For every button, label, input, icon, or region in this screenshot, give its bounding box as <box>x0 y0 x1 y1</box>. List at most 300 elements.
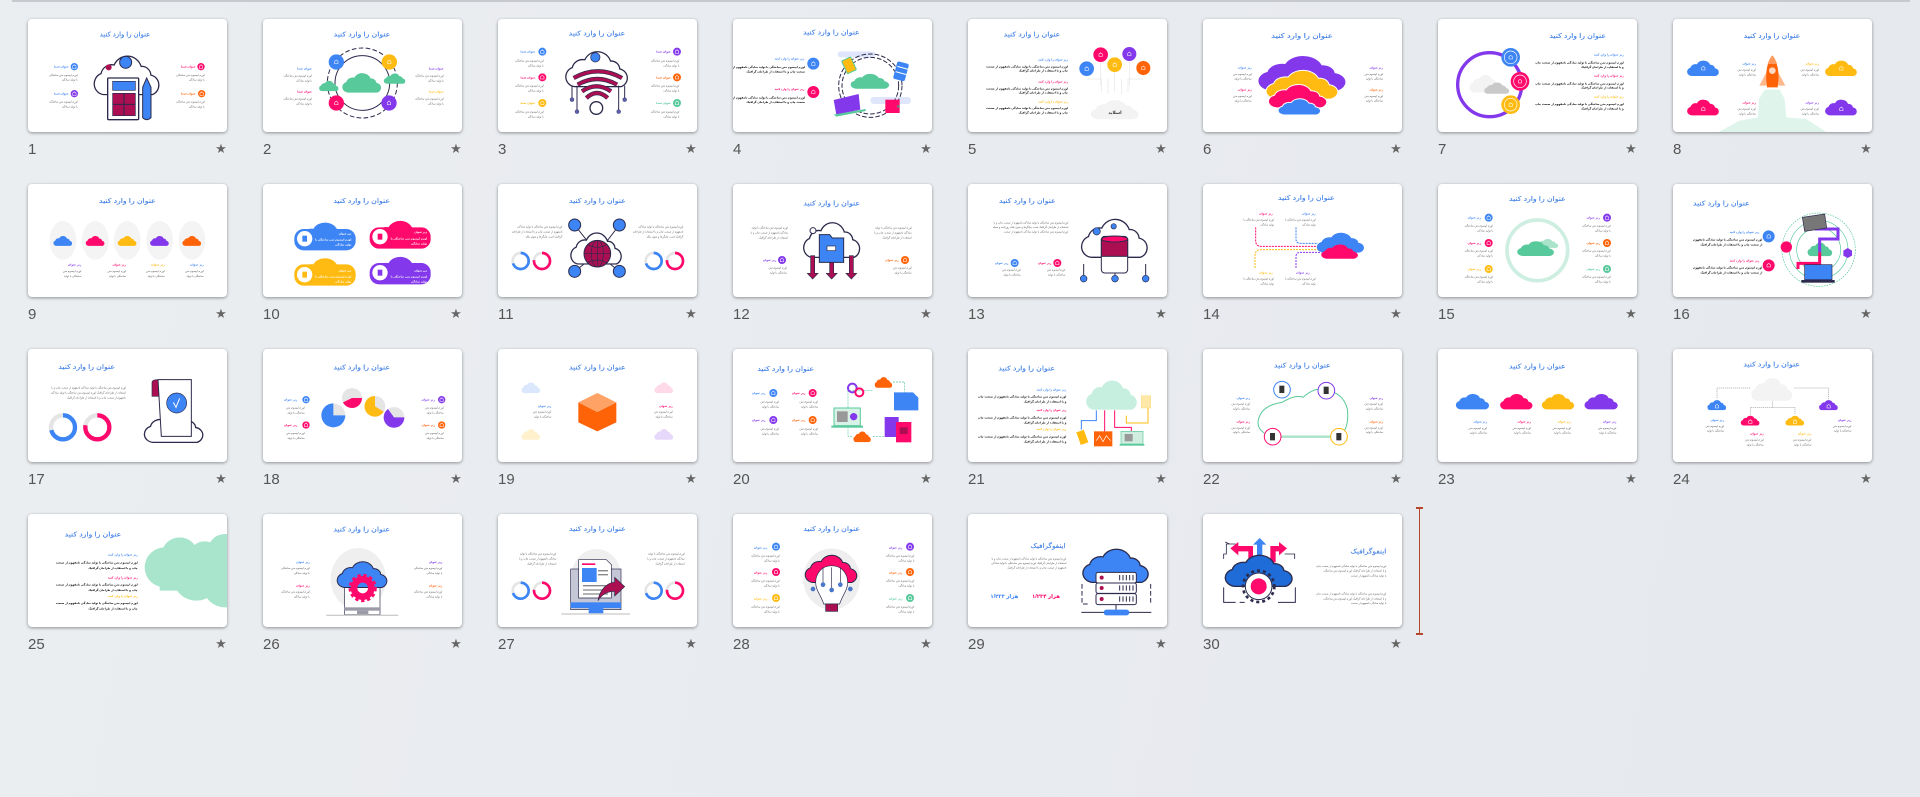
right labels: زیر عنوان <box>1586 216 1600 220</box>
labels: لورم ایپسوم متن <box>760 428 779 432</box>
left labels: با تولید سادگی <box>1477 254 1493 258</box>
labels: ساختگی با تولید <box>1599 431 1616 435</box>
labels: با تولید سادگی <box>294 571 310 575</box>
labels: زیر عنوان را وارد کنید <box>1594 53 1624 57</box>
labels: لورم ایپسوم متن ساختگی با <box>1284 277 1316 282</box>
slide 19: orange cube <box>498 349 697 462</box>
labels: و با استفاده از طراحان گرافیک <box>1581 107 1624 111</box>
labels: ساختگی با تولید <box>1234 77 1251 81</box>
labels: ساختگی با تولید <box>1746 443 1763 447</box>
labels: تولید سادگی <box>1260 223 1274 227</box>
body text: نامفهوم از صنعت چاپ و با استفاده از طراحان <box>512 231 562 235</box>
slide 29: server cloud <box>968 514 1167 627</box>
title: عنوان را وارد کنید <box>1743 361 1800 369</box>
number 29: 29 <box>968 636 985 653</box>
labels: زیر عنوان <box>284 398 297 402</box>
left labels: با تولید سادگی <box>528 115 544 119</box>
labels: لورم ایپسوم متن ساختگی با <box>1284 218 1316 223</box>
labels: ساختگی با تولید <box>1738 112 1756 116</box>
slide 25: large green cloud <box>28 514 227 627</box>
labels: لورم ایپسوم متن ساختگی <box>281 590 310 595</box>
labels: زیر عنوان را وارد کنید <box>1036 388 1066 392</box>
slide 15: ringed cloud <box>1438 184 1637 297</box>
right labels <box>176 63 205 109</box>
left labels: با تولید سادگی <box>62 105 78 109</box>
right labels: لورم ایپسوم متن ساختگی <box>176 100 205 105</box>
right labels: با تولید سادگی <box>189 105 205 109</box>
labels: چاپ و با استفاده از طراحان گرافیک <box>88 607 137 611</box>
left labels: زیر عنوان <box>754 546 767 550</box>
insertion marker <box>1416 507 1423 635</box>
number 7: 7 <box>1438 141 1446 158</box>
number 13: 13 <box>968 306 985 323</box>
title: عنوان را وارد کنید <box>58 363 115 371</box>
labels: زیر عنوان <box>414 231 427 234</box>
left labels: زیر عنوان <box>1467 267 1481 271</box>
labels: ساختگی با تولید <box>1365 407 1383 411</box>
labels: لورم ایپسوم متن <box>63 270 81 274</box>
star 10: ★ <box>450 307 462 322</box>
right labels: لورم ایپسوم متن ساختگی <box>651 110 679 115</box>
illustration: gears, clouds, screen, docs <box>831 378 918 443</box>
left labels: با تولید سادگی <box>528 64 544 68</box>
labels <box>1468 420 1616 435</box>
labels <box>995 259 1065 277</box>
pale clouds <box>521 383 673 440</box>
labels: با تولید سادگی <box>296 102 312 106</box>
ring and clouds <box>1507 220 1567 281</box>
labels: ساختگی با تولید <box>1469 431 1487 435</box>
title: عنوان را وارد کنید <box>568 30 625 38</box>
labels: ساختگی با تولید <box>1365 99 1383 103</box>
labels: زیر عنوان را وارد کنید <box>108 576 138 580</box>
body text: لورم ایپسوم متن ساختگی با تولید <box>519 552 556 557</box>
body text: لورم ایپسوم متن ساختگی با تولید سادگی نامفهوم از صنعت <box>1003 230 1068 235</box>
star 20: ★ <box>920 472 932 487</box>
title: عنوان را وارد کنید <box>1274 362 1330 370</box>
labels: زیر عنوان <box>538 404 551 408</box>
labels: زیر عنوان <box>1603 420 1616 424</box>
slide 12: folder cloud with arrows <box>733 184 932 297</box>
left labels: با تولید سادگی <box>528 89 544 93</box>
labels: تولید سادگی <box>1302 223 1316 227</box>
slide 30: gear cloud with arrows <box>1203 514 1402 627</box>
labels: ساختگی با تولید <box>1801 73 1819 77</box>
right labels: لورم ایپسوم متن ساختگی <box>886 605 914 610</box>
labels: لورم ایپسوم متن ساختگی با تولید سادگی نامفهوم از صنعت <box>56 601 137 605</box>
labels: زیر عنوان را وارد کنید <box>1729 259 1759 263</box>
labels: لورم ایپسوم متن ساختگی با تولید سادگی نامفهوم از صنعت چاپ <box>1535 82 1623 86</box>
right labels: با تولید سادگی <box>189 78 205 82</box>
pie charts <box>321 388 404 428</box>
labels: لورم ایپسوم متن <box>1705 425 1724 429</box>
labels: عنوان شما <box>297 90 312 94</box>
labels: ساختگی با تولید <box>1738 73 1756 77</box>
statistic figures: ۱/۲۳۴ هزار <box>1032 594 1060 600</box>
labels: زیر عنوان را وارد کنید <box>108 553 138 557</box>
labels: با تولید سادگی <box>294 595 310 599</box>
labels: لورم ایپسوم متن ساختگی با <box>315 275 351 279</box>
labels: ساختگی با تولید <box>287 411 304 415</box>
labels: لورم ایپسوم متن ساختگی با تولید سادگی نامفهوم از صنعت چاپ <box>1535 61 1623 65</box>
right labels: با تولید سادگی <box>898 610 914 614</box>
body text <box>993 221 1068 235</box>
slide 13: database cloud <box>968 184 1167 297</box>
labels: زیر عنوان را وارد کنید <box>1594 74 1624 78</box>
number 15: 15 <box>1438 306 1455 323</box>
star 27: ★ <box>685 637 697 652</box>
right labels: عنوان شما <box>181 92 195 96</box>
labels: با تولید سادگی <box>426 595 442 599</box>
right labels: با تولید سادگی <box>663 115 679 119</box>
title: عنوان را وارد کنید <box>64 531 121 539</box>
body text: نامفهوم از صنعت چاپ و با استفاده از طراحان <box>633 231 683 235</box>
body text: استفاده از طراحان گرافیک <box>758 236 788 240</box>
right labels: لورم ایپسوم متن ساختگی <box>886 554 914 559</box>
labels: زیر عنوان را وارد کنید <box>1038 58 1068 62</box>
star 16: ★ <box>1860 307 1872 322</box>
right labels: با تولید سادگی <box>663 64 679 68</box>
body text: استفاده از طراحان گرافیک است چاپگرها و متون بلکه روزنامه و مجله <box>993 225 1068 229</box>
labels: تولید سادگی <box>335 243 351 247</box>
star 14: ★ <box>1390 307 1402 322</box>
labels: زیر عنوان <box>296 560 310 564</box>
labels: لورم ایپسوم متن <box>1833 425 1851 429</box>
illustration: cloud path and nodes <box>1258 382 1347 445</box>
labels: تولید سادگی <box>410 280 427 284</box>
slide 20: gears and documents <box>733 349 932 462</box>
number 18: 18 <box>263 471 280 488</box>
body text <box>518 552 685 566</box>
labels: لورم ایپسوم متن ساختگی با <box>315 238 351 242</box>
right labels: زیر عنوان <box>1586 241 1600 245</box>
slide 22: cloud outline with nodes <box>1203 349 1402 462</box>
left labels: لورم ایپسوم متن ساختگی <box>1464 224 1493 229</box>
labels: چاپ و با استفاده از طراحان گرافیک <box>88 588 137 592</box>
right labels: زیر عنوان <box>889 571 902 575</box>
labels: لورم ایپسوم متن <box>1231 427 1250 431</box>
labels: زیر عنوان <box>1369 420 1383 424</box>
slide 1: calculator cloud <box>28 19 227 132</box>
body text: با تولید سادگی نامفهوم از صنعت <box>1350 601 1386 606</box>
body text: نامفهوم از صنعت چاپ و با استفاده از طراحان گرافیک <box>1007 566 1066 571</box>
body text: سادگی نامفهوم از صنعت چاپ و با <box>750 231 788 236</box>
title: عنوان را وارد کنید <box>333 526 390 534</box>
title: عنوان را وارد کنید <box>99 197 155 205</box>
labels: زیر عنوان <box>1557 420 1571 424</box>
labels <box>1693 230 1774 275</box>
title: عنوان را وارد کنید <box>99 31 150 39</box>
labels: ساختگی با تولید <box>426 411 443 415</box>
illustration: cloud ring with devices <box>833 52 911 118</box>
right labels: با تولید سادگی <box>1595 229 1611 233</box>
labels: لورم ایپسوم متن <box>760 401 779 405</box>
labels: زیر عنوان <box>1259 212 1273 216</box>
left labels: با تولید سادگی <box>1477 280 1493 284</box>
labels: زیر عنوان <box>1805 62 1819 66</box>
labels: تولید سادگی <box>410 242 427 246</box>
left labels: با تولید سادگی <box>764 559 780 563</box>
labels: زیر عنوان <box>1517 420 1531 424</box>
body text: گرافیک است چاپگرها و متون بلکه <box>525 235 563 239</box>
illustration: cloud, gear, monitor <box>326 548 398 616</box>
labels: لورم ایپسوم متن ساختگی با تولید سادگی نامفهوم از صنعت <box>986 65 1068 69</box>
left labels: زیر عنوان <box>1467 216 1481 220</box>
number 10: 10 <box>263 306 280 323</box>
labels: عنوان شما <box>429 67 443 71</box>
labels: زیر عنوان <box>1236 396 1250 400</box>
labels: چاپ و با استفاده از طراحان گرافیک <box>1018 69 1068 73</box>
slide 8: rocket <box>1673 19 1872 132</box>
star 17: ★ <box>215 472 227 487</box>
body text: لورم ایپسوم متن ساختگی با تولید سادگی نامفهوم از صنعت چاپ <box>1316 592 1386 597</box>
labels: لورم ایپسوم متن ساختگی <box>415 97 444 102</box>
star 6: ★ <box>1390 142 1402 157</box>
body text: استفاده از طراحان گرافیک لورم ایپسوم متن ساختگی با تولید سادگی <box>991 561 1066 566</box>
body text: و با استفاده از طراحان گرافیک لورم ایپسوم متن ساختگی <box>1323 597 1387 602</box>
title: عنوان را وارد کنید <box>333 31 390 39</box>
labels: زیر عنوان <box>659 404 673 408</box>
star 11: ★ <box>685 307 697 322</box>
star 22: ★ <box>1390 472 1402 487</box>
star 4: ★ <box>920 142 932 157</box>
illustration: ring, gray clouds and nodes <box>1457 48 1529 117</box>
labels: لورم ایپسوم متن ساختگی با تولید سادگی نامفهوم از صنعت <box>986 87 1068 91</box>
labels: زیر عنوان <box>1742 62 1756 66</box>
right labels: عنوان شما <box>656 76 671 80</box>
labels: ساختگی با تولید <box>1232 407 1250 411</box>
slide 6: stacked clouds <box>1203 19 1402 132</box>
labels: زیر عنوان <box>1369 396 1383 400</box>
slide 24: cloud hierarchy <box>1673 349 1872 462</box>
star 18: ★ <box>450 472 462 487</box>
labels: با تولید سادگی <box>428 102 444 106</box>
labels: لورم ایپسوم متن ساختگی <box>283 74 312 79</box>
illustration: icons linked to cloud: اسلاید <box>1108 110 1122 115</box>
labels: لورم ایپسوم متن <box>1364 95 1383 99</box>
title: عنوان را وارد کنید <box>803 200 860 208</box>
labels: با تولید سادگی <box>426 571 442 575</box>
labels: زیر عنوان را وارد کنید <box>1038 100 1068 104</box>
illustration: arrows, cloud and gear <box>1223 538 1295 603</box>
labels: ساختگی با تولید <box>761 405 779 409</box>
clouds row <box>49 221 205 260</box>
labels: تولید سادگی <box>1260 282 1274 286</box>
labels: با تولید سادگی <box>428 79 444 83</box>
labels: زیر عنوان <box>752 418 765 422</box>
labels: زیر عنوان <box>792 418 805 422</box>
star 8: ★ <box>1860 142 1872 157</box>
left labels: لورم ایپسوم متن ساختگی <box>1464 249 1493 254</box>
labels: با تولید سادگی <box>296 79 312 83</box>
body text: لورم ایپسوم متن ساختگی با تولید <box>875 226 912 231</box>
labels: زیر عنوان را وارد کنید <box>1594 95 1624 99</box>
illustration: rings, nodes and clouds <box>319 48 405 118</box>
labels: زیر عنوان <box>338 270 351 273</box>
star 23: ★ <box>1625 472 1637 487</box>
labels <box>763 256 912 275</box>
right labels: عنوان شما <box>656 101 671 105</box>
body text: و با استفاده از طراحان گرافیک لورم ایپسوم متن ساختگی <box>1323 569 1387 574</box>
labels: زیر عنوان را وارد کنید <box>1036 408 1066 412</box>
slide 5: circles to slide cloud <box>968 19 1167 132</box>
dashed connectors <box>1255 228 1321 268</box>
slide 9: five small clouds <box>28 184 227 297</box>
right labels: لورم ایپسوم متن ساختگی <box>1582 224 1611 229</box>
hierarchy connectors <box>1717 388 1828 415</box>
title: عنوان را وارد کنید <box>1278 194 1334 202</box>
labels: لورم ایپسوم متن <box>1737 108 1756 112</box>
number 16: 16 <box>1673 306 1690 323</box>
body text: گرافیک است چاپگرها و متون بلکه <box>646 235 684 239</box>
green cloud <box>144 534 246 608</box>
title: عنوان را وارد کنید <box>333 364 390 372</box>
number 27: 27 <box>498 636 515 653</box>
left labels: با تولید سادگی <box>1477 229 1493 233</box>
labels: زیر عنوان <box>1742 101 1756 105</box>
left labels <box>515 48 546 119</box>
labels: زیر عنوان <box>190 263 204 267</box>
body text: استفاده از طراحان گرافیک لورم ایپسوم متن ساختگی با تولید سادگی <box>51 391 126 396</box>
labels: زیر عنوان <box>1236 420 1250 424</box>
labels <box>1243 212 1316 286</box>
star 30: ★ <box>1390 637 1402 652</box>
right labels: لورم ایپسوم متن ساختگی <box>1582 249 1611 254</box>
right labels: لورم ایپسوم متن ساختگی <box>651 84 679 89</box>
labels: لورم ایپسوم متن <box>1800 108 1819 112</box>
illustration: globe in cloud with nodes <box>568 219 625 278</box>
left labels: عنوان شما <box>54 65 68 69</box>
labels: ساختگی با تولید <box>108 274 126 278</box>
number 9: 9 <box>28 306 36 323</box>
statistic figures <box>990 594 1060 600</box>
labels: زیر عنوان <box>792 391 805 395</box>
right labels: عنوان شما <box>181 65 195 69</box>
right labels: زیر عنوان <box>889 546 902 550</box>
clouds <box>1316 233 1364 259</box>
body text: لورم ایپسوم متن ساختگی با تولید سادگی نامفهوم از صنعت چاپ و با <box>991 557 1066 562</box>
labels: لورم ایپسوم متن ساختگی با تولید سادگی نامفهوم <box>1693 266 1762 270</box>
slide 3: wifi cloud <box>498 19 697 132</box>
labels: ساختگی با تولید <box>1801 112 1819 116</box>
labels: لورم ایپسوم متن <box>1002 269 1021 273</box>
labels: زیر عنوان <box>414 270 427 273</box>
title: عنوان را وارد کنید <box>1271 32 1333 40</box>
slide 17: scroll on cloud <box>28 349 227 462</box>
labels: صنعت چاپ و با استفاده از طراحان گرافیک <box>746 70 805 74</box>
body text: لورم ایپسوم متن ساختگی با تولید سادگی <box>517 225 562 230</box>
labels: لورم ایپسوم متن ساختگی با تولید سادگی نامفهوم از صنعت <box>56 561 137 565</box>
labels: لورم ایپسوم متن <box>185 270 204 274</box>
labels <box>56 553 138 611</box>
labels: ساختگی با تولید <box>426 436 443 440</box>
labels: از صنعت چاپ و با استفاده از طراحان گرافیک <box>1700 271 1762 275</box>
labels: لورم ایپسوم متن ساختگی با تولید سادگی نامفهوم از <box>733 96 805 100</box>
labels: لورم ایپسوم متن ساختگی با تولید سادگی نامفهوم <box>1693 238 1762 242</box>
number 23: 23 <box>1438 471 1455 488</box>
labels: لورم ایپسوم متن <box>1468 427 1487 431</box>
labels: و با استفاده از طراحان گرافیک <box>1023 440 1066 444</box>
labels <box>63 263 204 278</box>
donut charts <box>512 253 683 269</box>
labels: زیر عنوان <box>885 258 899 262</box>
labels: زیر عنوان را وارد کنید <box>774 57 804 61</box>
body text: استفاده از طراحان گرافیک <box>882 236 912 240</box>
left labels: با تولید سادگی <box>764 584 780 588</box>
star 24: ★ <box>1860 472 1872 487</box>
body text: استفاده از طراحان گرافیک <box>527 562 556 566</box>
labels: لورم ایپسوم متن <box>1364 403 1383 407</box>
labels: لورم ایپسوم متن ساختگی با تولید سادگی نامفهوم از <box>733 65 805 69</box>
cube <box>578 393 616 432</box>
labels: زیر عنوان <box>151 263 165 267</box>
cloud cards <box>294 221 430 286</box>
illustration: cloud, folder and arrows <box>803 223 859 279</box>
labels: زیر عنوان <box>752 391 765 395</box>
number 24: 24 <box>1673 471 1690 488</box>
left labels: زیر عنوان <box>1467 241 1481 245</box>
labels: زیر عنوان <box>1473 420 1487 424</box>
illustration: cloud and bulb <box>803 549 860 612</box>
labels: ساختگی با تولید <box>1513 431 1531 435</box>
labels: زیر عنوان <box>284 423 297 427</box>
donut charts <box>512 583 683 599</box>
labels: لورم ایپسوم متن ساختگی با <box>1243 218 1274 223</box>
slide 4: devices ring <box>733 19 932 132</box>
labels: لورم ایپسوم متن <box>1047 269 1065 273</box>
left labels: عنوان شما <box>520 101 535 105</box>
slide 11: globe cloud <box>498 184 697 297</box>
number 30: 30 <box>1203 636 1220 653</box>
labels: ساختگی با تولید <box>769 271 787 275</box>
number 26: 26 <box>263 636 280 653</box>
star 7: ★ <box>1625 142 1637 157</box>
slide 7: purple ring <box>1438 19 1637 132</box>
labels <box>281 560 442 599</box>
labels: لورم ایپسوم متن <box>1745 439 1764 443</box>
left labels <box>1464 214 1493 284</box>
labels: چاپ و با استفاده از طراحان گرافیک <box>1018 111 1068 115</box>
labels: زیر عنوان <box>1238 88 1252 92</box>
labels: زیر عنوان <box>338 233 351 236</box>
labels: زیر عنوان <box>296 584 310 588</box>
title: عنوان را وارد کنید <box>1509 195 1565 203</box>
left labels <box>49 63 78 109</box>
slide 16: connected devices <box>1673 184 1872 297</box>
star 1: ★ <box>215 142 227 157</box>
donut charts <box>51 416 109 440</box>
right labels: لورم ایپسوم متن ساختگی <box>1582 275 1611 280</box>
labels: عنوان شما <box>429 90 443 94</box>
star 25: ★ <box>215 637 227 652</box>
right labels: با تولید سادگی <box>1595 280 1611 284</box>
right labels <box>886 543 914 614</box>
right labels: با تولید سادگی <box>898 559 914 563</box>
labels: لورم ایپسوم متن <box>1552 427 1571 431</box>
right labels: زیر عنوان <box>1586 267 1600 271</box>
labels: لورم ایپسوم متن <box>1800 69 1819 73</box>
labels: ساختگی با تولید <box>761 432 779 436</box>
illustration: scroll and cloud <box>144 380 202 443</box>
labels <box>1705 418 1851 447</box>
left labels: لورم ایپسوم متن ساختگی <box>751 554 780 559</box>
body text: لورم ایپسوم متن ساختگی با تولید <box>648 552 685 557</box>
left labels: عنوان شما <box>520 50 535 54</box>
body text: لورم ایپسوم متن ساختگی با تولید سادگی <box>638 225 683 230</box>
right labels: با تولید سادگی <box>898 584 914 588</box>
labels: لورم ایپسوم متن <box>1364 73 1383 77</box>
left labels: زیر عنوان <box>754 571 767 575</box>
